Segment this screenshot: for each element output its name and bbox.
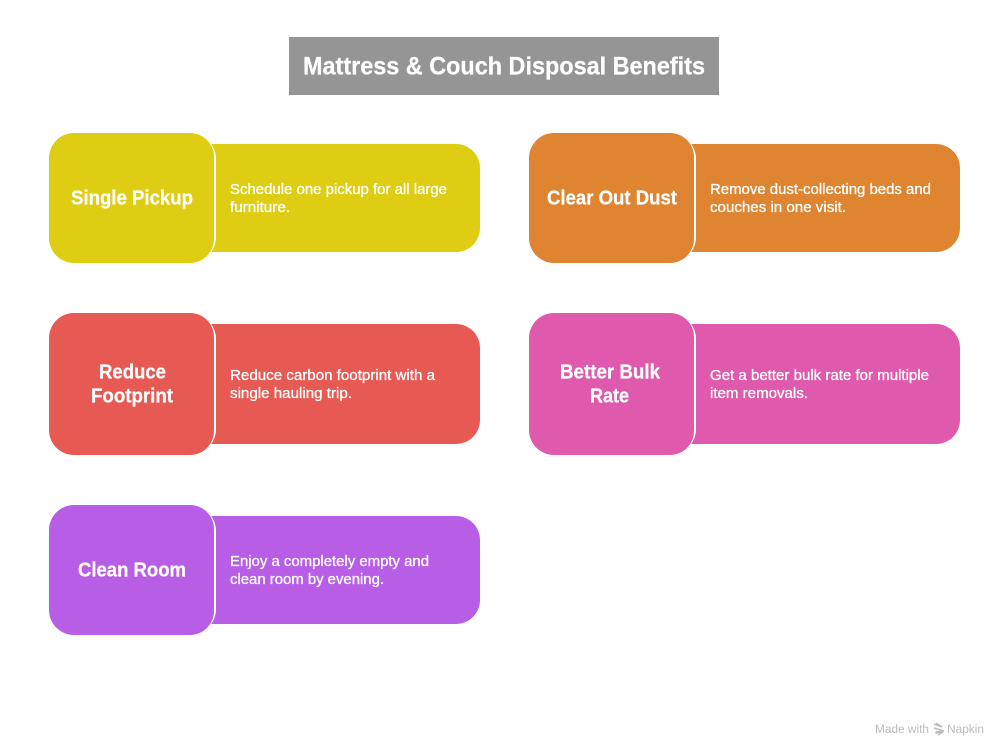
description: clean room: Enjoy a completely empty and [230, 553, 429, 570]
description: clean room: clean room by evening. [230, 571, 384, 588]
description: clean room [200, 516, 480, 624]
heading: reduce footprint [49, 313, 216, 455]
heading: reduce footprint: Reduce [99, 362, 166, 384]
heading: single pickup [49, 133, 216, 263]
description: clear out dust: Remove dust-collecting beds and [710, 181, 931, 198]
description: better bulk rate: Get a better bulk rate for multiple [710, 367, 929, 384]
heading: reduce footprint: Footprint [91, 386, 173, 408]
watermark: made with napkin: Napkin [947, 724, 984, 736]
heading: clean room [49, 505, 216, 635]
panel: better bulk rate [529, 313, 960, 455]
description: clear out dust: couches in one visit. [710, 199, 846, 216]
description: single pickup: furniture. [230, 199, 290, 216]
heading: better bulk rate [529, 313, 696, 455]
title [289, 37, 719, 95]
heading: better bulk rate: Rate [590, 386, 629, 408]
description: better bulk rate [680, 324, 960, 444]
description: clear out dust [680, 144, 960, 252]
heading: clean room: Clean Room [78, 560, 186, 582]
description: single pickup [200, 144, 480, 252]
title: Mattress & Couch Disposal Benefits [303, 52, 705, 80]
panel: clear out dust [529, 133, 960, 263]
icon: napkin logo [934, 723, 944, 735]
description: reduce footprint: Reduce carbon footprint with a [230, 367, 436, 384]
heading: single pickup: Single Pickup [71, 188, 193, 210]
heading: better bulk rate: Better Bulk [560, 362, 661, 384]
panel: clean room [49, 505, 480, 635]
watermark: made with napkin [875, 723, 984, 736]
description: reduce footprint [200, 324, 480, 444]
description: reduce footprint: single hauling trip. [230, 385, 352, 402]
description: single pickup: Schedule one pickup for all large [230, 181, 447, 198]
heading: clear out dust: Clear Out Dust [547, 188, 677, 210]
heading: clear out dust [529, 133, 696, 263]
panel: single pickup [49, 133, 480, 263]
description: better bulk rate: item removals. [710, 385, 808, 402]
watermark: made with napkin: Made with [875, 724, 929, 736]
panel: reduce footprint [49, 313, 480, 455]
